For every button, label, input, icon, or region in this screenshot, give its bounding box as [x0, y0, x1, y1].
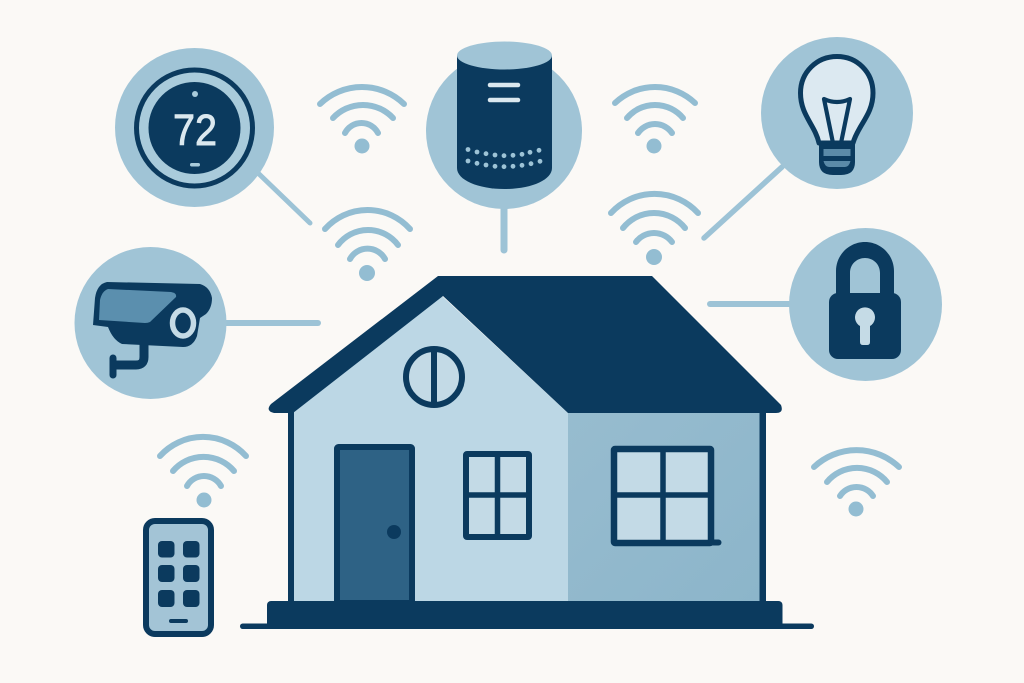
foundation and ground line: [240, 601, 814, 629]
wifi: center left: [325, 210, 410, 281]
wifi: far right: [814, 450, 899, 516]
wall edges: [288, 410, 766, 603]
wifi: center right: [611, 194, 698, 265]
icon: thermostat: [115, 48, 274, 207]
connector: camera: [224, 320, 318, 326]
right wall: [568, 413, 761, 602]
icon: smart speaker: [426, 42, 582, 209]
connector: speaker: [500, 207, 508, 250]
connector: light bulb: [704, 167, 782, 238]
icon: smartphone remote: [146, 521, 211, 634]
connector: lock: [710, 301, 791, 307]
wifi: above remote: [160, 437, 246, 508]
icon: security camera: [74, 247, 226, 399]
left window: [466, 454, 529, 537]
house: [240, 276, 814, 629]
roof: [269, 276, 782, 413]
round attic window: [406, 349, 462, 405]
left wall: [291, 296, 568, 602]
connector: thermostat: [258, 173, 310, 223]
right window: [614, 449, 718, 543]
icon: light bulb: [761, 37, 913, 189]
wifi: top right: [615, 87, 695, 154]
icon: padlock: [789, 228, 942, 381]
thermostat reading: 72: [173, 106, 217, 155]
door: [337, 447, 412, 603]
wifi: top left: [320, 87, 404, 154]
